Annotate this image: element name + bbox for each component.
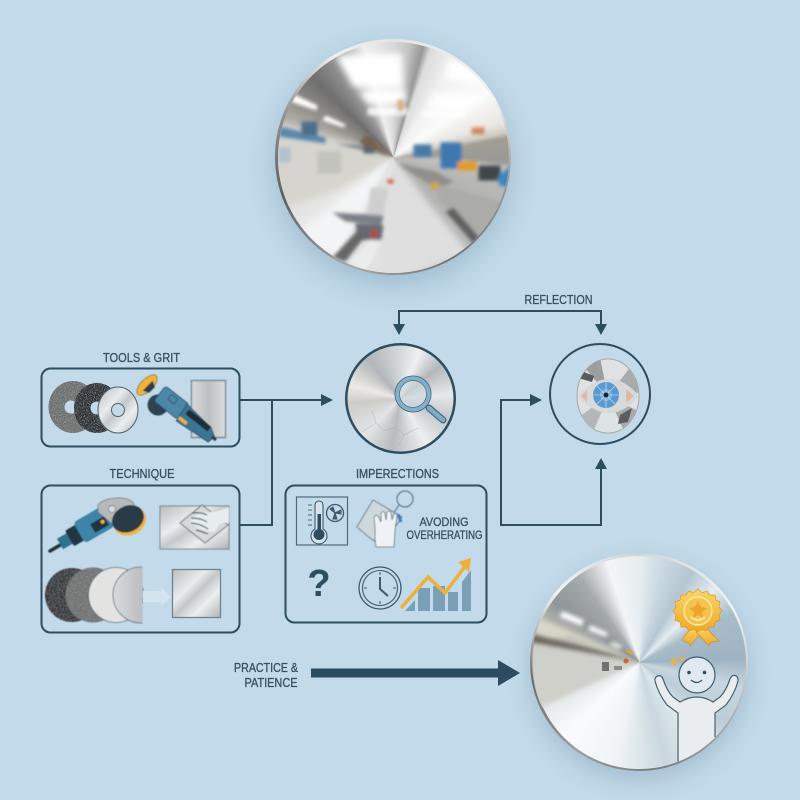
panel: finished mirror disc with reward xyxy=(530,553,748,771)
arrow: feedback to eye xyxy=(501,394,607,525)
icon: clock xyxy=(359,567,401,609)
heading: imperfections: IMPERECTIONS xyxy=(356,467,439,481)
icon: thermometer and fan xyxy=(296,497,348,545)
icon: hand with cloth and swab xyxy=(357,491,413,547)
icon: grinder tool on silver plate xyxy=(130,368,226,447)
icon: award medal xyxy=(673,589,722,646)
icon: hand wiping silver plate xyxy=(160,505,229,549)
icon: polished square xyxy=(172,570,220,618)
chart: growth bars with arrow xyxy=(401,558,471,611)
scene: blurred factory reflection on finished disc xyxy=(532,611,640,712)
heading: tools and grit: TOOLS & GRIT xyxy=(103,351,180,365)
icon: happy person with sparkles xyxy=(654,654,739,762)
label: practice and patience: PRACTICE & xyxy=(234,661,299,675)
icon: magnifying glass and scratches xyxy=(362,376,443,445)
connector: tools and technique to inspection xyxy=(240,394,333,525)
icon: orbital polisher xyxy=(50,498,151,554)
text: avoiding overheating: AVODING xyxy=(420,515,468,529)
label: practice and patience xyxy=(234,661,299,690)
panel: eye disc ring xyxy=(549,343,651,445)
panel: imperfections xyxy=(286,486,486,622)
text: avoiding overheating: OVERHERATING xyxy=(406,528,482,542)
panel: polished mirror disc reflecting factory xyxy=(275,39,511,275)
label: practice and patience: PATIENCE xyxy=(244,676,298,690)
heading: reflection: REFLECTION xyxy=(524,293,592,307)
panel: tools and grit xyxy=(42,368,240,447)
heading: technique: TECHNIQUE xyxy=(110,467,174,481)
text: avoiding overheating xyxy=(406,515,482,542)
arrow: progress to finish xyxy=(143,587,171,606)
icon: abrasive disc sequence xyxy=(44,566,144,624)
icon: grinding discs xyxy=(48,381,138,433)
arrow: practice to finish xyxy=(311,660,520,686)
panel: technique xyxy=(42,486,240,632)
icon: question mark: ? xyxy=(307,563,331,605)
arrow: reflection loop xyxy=(393,311,607,335)
icon: eye in metal disc xyxy=(576,358,640,434)
panel: inspection disc xyxy=(345,343,456,454)
